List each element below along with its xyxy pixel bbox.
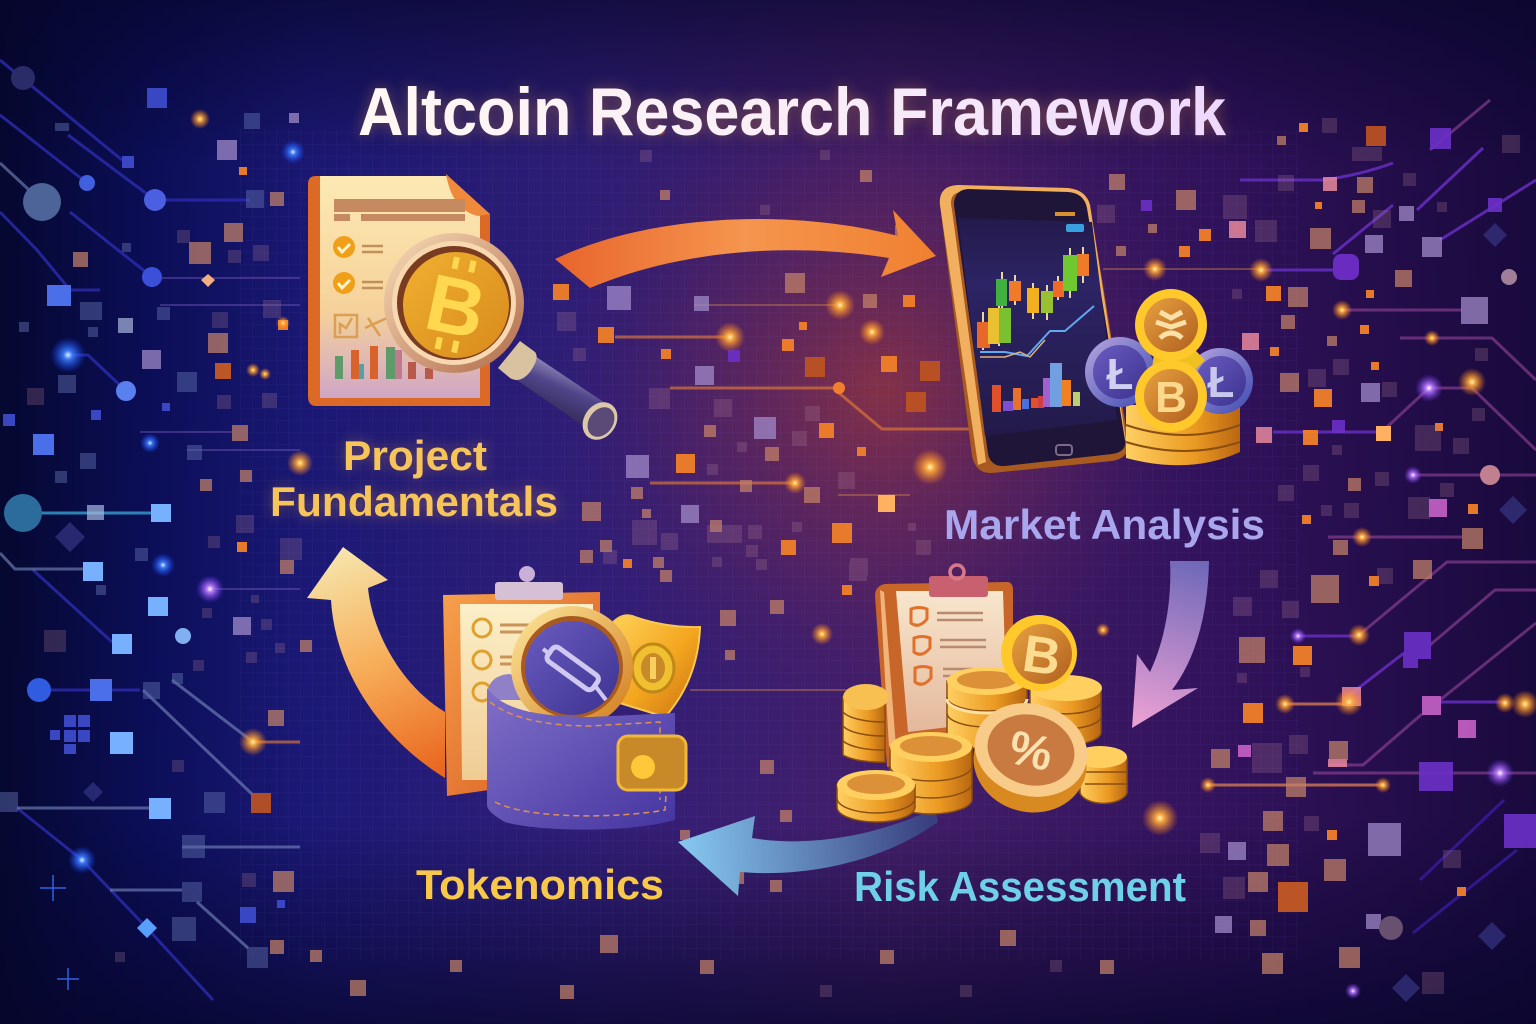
coin stack: back left: [843, 684, 889, 762]
pixel squares: blue: [3, 88, 285, 923]
label: Market Analysis: Market Analysis: [944, 501, 1265, 548]
magnifier: [384, 233, 625, 447]
pixel squares: lilac: [142, 113, 1488, 933]
pixel squares: saturated purple: [728, 128, 1536, 848]
icon: project document with magnifier: [308, 174, 625, 447]
percent coin: %: [1004, 721, 1057, 782]
percent coin: [962, 691, 1098, 825]
pixel squares: steel blue dim: [0, 113, 268, 968]
shield coin: [632, 644, 674, 692]
label: Tokenomics: Tokenomics: [416, 861, 664, 908]
wallet: [487, 688, 686, 830]
label: Project Fundamentals: [270, 432, 558, 525]
arrow: risk assessment to tokenomics: [678, 808, 938, 896]
pixel squares: tan: [73, 136, 1483, 999]
coin stack: right low: [1073, 746, 1127, 803]
arrow: tokenomics to project fundamentals: [307, 547, 445, 778]
coin stack and crypto coins: Ł: [1107, 350, 1133, 399]
gold bitcoin coin: B: [1019, 625, 1064, 687]
coin stack: lower center: [890, 732, 972, 814]
icon: wallet with tokens: [443, 566, 700, 830]
coin stack and crypto coins: B: [1155, 373, 1187, 422]
phone: [940, 185, 1128, 473]
gold bitcoin coin: [1001, 615, 1077, 691]
pixel squares: orange: [237, 123, 1478, 896]
coin stack: lower left: [837, 770, 915, 822]
clipboard: [875, 565, 1013, 767]
label: Project Fundamentals: Project: [343, 432, 487, 479]
document: [308, 174, 490, 406]
coin stack: center back: [947, 667, 1027, 749]
shield: [608, 615, 700, 717]
label: Project Fundamentals: Fundamentals: [270, 478, 558, 525]
icon: risk clipboard with coins: [837, 565, 1127, 825]
coin stack: right back: [1030, 675, 1102, 745]
magnifier: B: [418, 257, 493, 356]
wallet back: [487, 674, 560, 700]
arrow: market analysis to risk assessment: [1132, 561, 1209, 728]
candlestick chart: [977, 247, 1094, 455]
clipboard: [443, 566, 600, 796]
coin stack and crypto coins: Ł: [1208, 358, 1234, 407]
diamonds: [55, 223, 1527, 1002]
arrow: project fundamentals to market analysis: [555, 210, 936, 288]
icon: phone with chart and coins: [940, 185, 1253, 473]
title: Altcoin Research Framework: [358, 74, 1226, 150]
token coin: [511, 606, 633, 728]
coin stack and crypto coins: [1085, 289, 1253, 465]
label: Risk Assessment: Risk Assessment: [854, 863, 1186, 910]
